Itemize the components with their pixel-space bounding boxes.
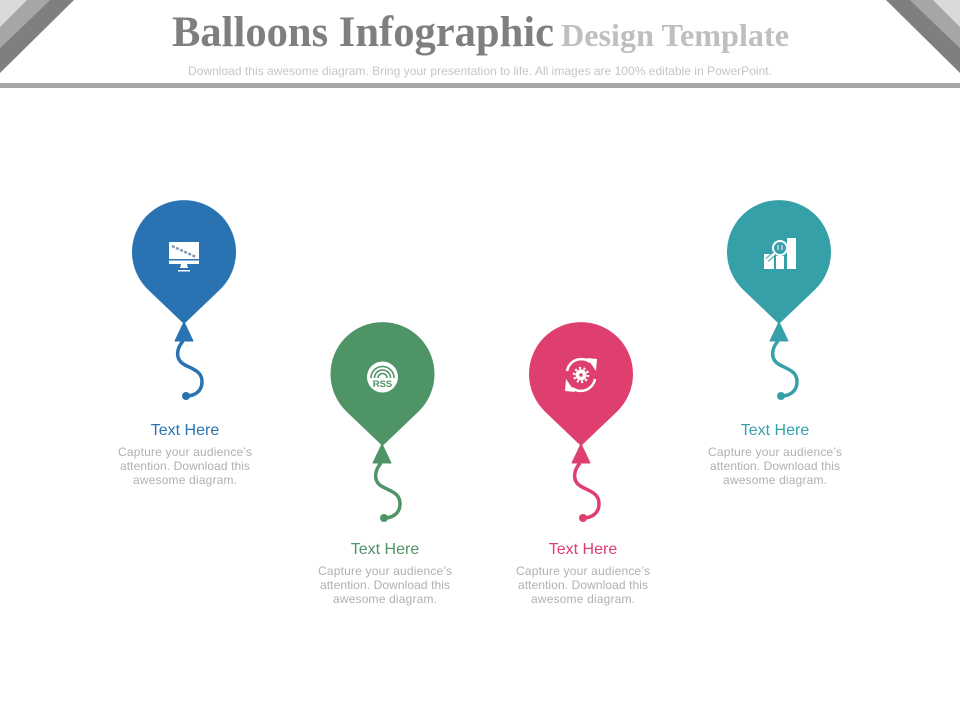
label: teal text: Capture your audience’s: [708, 445, 842, 459]
balloon string: [773, 341, 797, 396]
balloon knot: [770, 322, 788, 341]
subtitle: Download this awesome diagram. Bring your presentation to life. All images are 100% editable in PowerPoint.: [188, 64, 772, 78]
icon: RSS: RSS: [373, 379, 392, 390]
icon: RSS: [367, 362, 398, 392]
balloon: green: [331, 322, 435, 522]
label: green text: Capture your audience’s: [318, 564, 452, 578]
title: [172, 9, 789, 56]
balloon knot: [373, 444, 391, 463]
balloon knot: [175, 322, 193, 341]
balloon string: [575, 463, 599, 518]
label: blue text: attention. Download this: [120, 459, 250, 473]
string end dot: [579, 514, 587, 522]
balloon: teal: [727, 200, 831, 400]
label: blue text: [118, 422, 252, 487]
header rule: [0, 83, 960, 88]
balloon: blue: [132, 200, 236, 400]
balloon string: [376, 463, 400, 518]
label: pink text: attention. Download this: [518, 578, 648, 592]
string end dot: [182, 392, 190, 400]
label: blue text: awesome diagram.: [133, 473, 237, 487]
label: teal text: [708, 422, 842, 487]
string end dot: [777, 392, 785, 400]
label: teal text: attention. Download this: [710, 459, 840, 473]
icon: monitor: [169, 242, 199, 272]
icon: refresh gear: [565, 358, 597, 392]
label: pink text: awesome diagram.: [531, 592, 635, 606]
title: Balloons Infographic: [172, 9, 554, 56]
balloon string: [178, 341, 202, 396]
label: pink text: Capture your audience’s: [516, 564, 650, 578]
corner ribbon: top right: [886, 0, 960, 73]
label: green text: Text Here: [351, 541, 419, 558]
label: green text: awesome diagram.: [333, 592, 437, 606]
label: green text: [318, 541, 452, 606]
label: pink text: [516, 541, 650, 606]
label: green text: attention. Download this: [320, 578, 450, 592]
balloon: pink: [529, 322, 633, 522]
icon: chart with magnifier: [764, 238, 796, 269]
string end dot: [380, 514, 388, 522]
label: blue text: Text Here: [151, 422, 219, 439]
label: teal text: awesome diagram.: [723, 473, 827, 487]
title: Design Template: [561, 17, 789, 53]
label: pink text: Text Here: [549, 541, 617, 558]
label: teal text: Text Here: [741, 422, 809, 439]
label: blue text: Capture your audience’s: [118, 445, 252, 459]
balloon knot: [572, 444, 590, 463]
corner ribbon: top left: [0, 0, 74, 73]
